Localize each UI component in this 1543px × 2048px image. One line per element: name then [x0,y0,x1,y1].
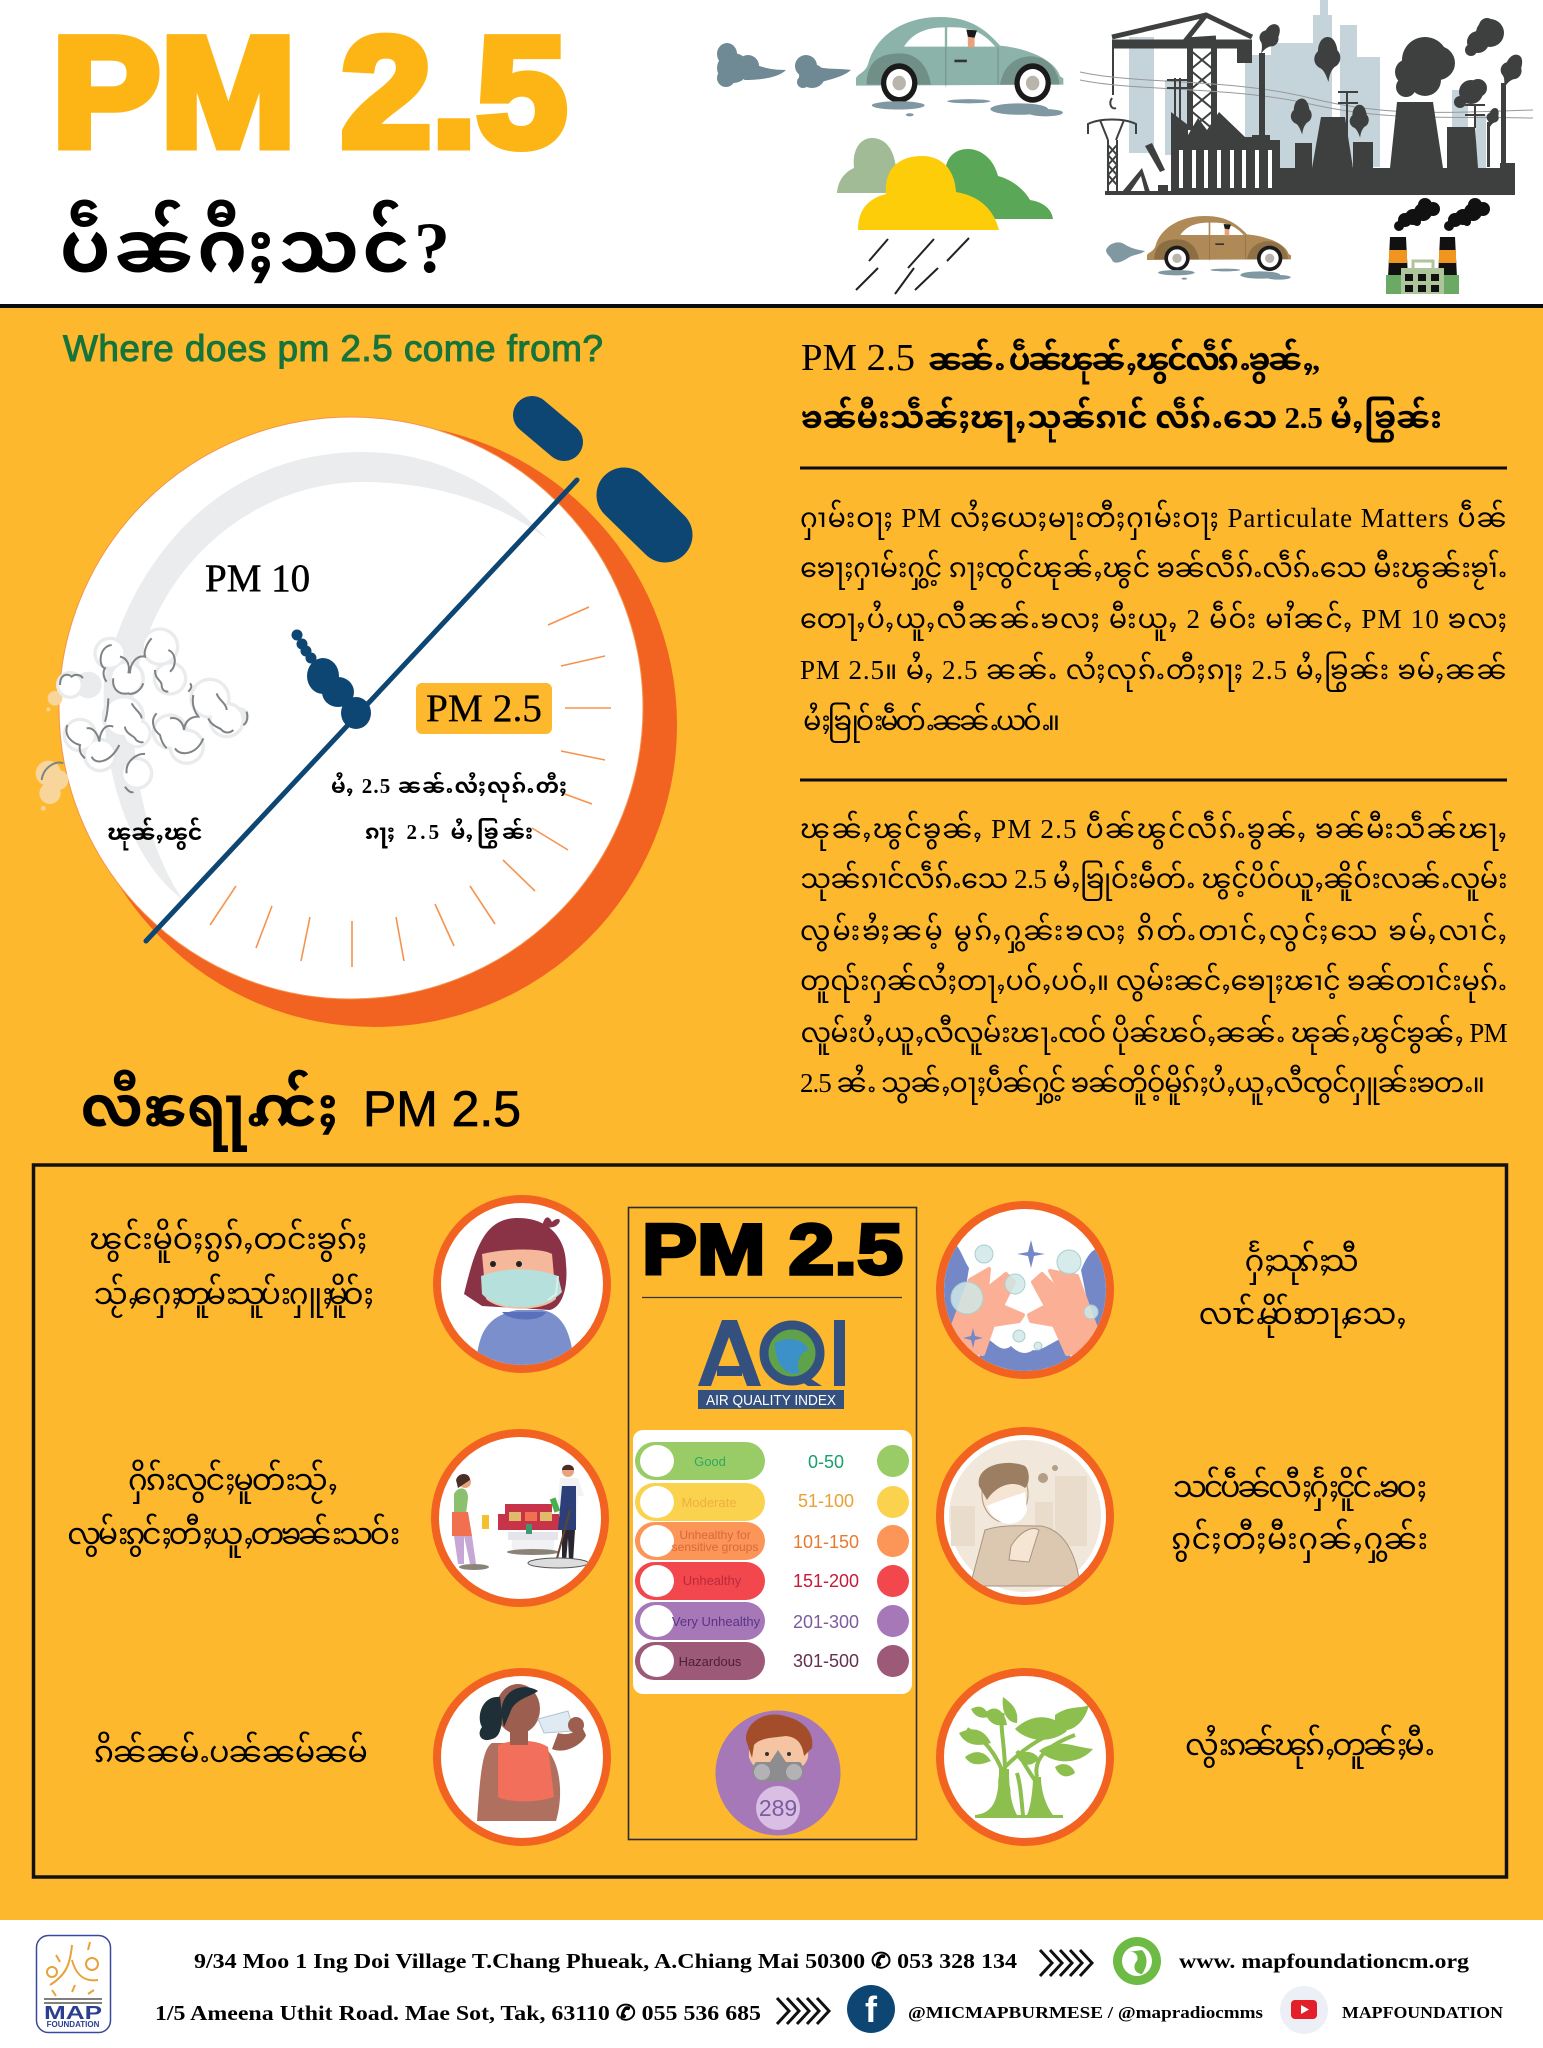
heading: prevention PM 2.5: PM 2.5 [363,1081,521,1137]
text block: PM definition: မႆႈၶြုဝ်းမဵတ်ႉၼၼ်ႉယဝ်ႉ။ [803,702,1060,743]
tip text: see a doctor: သင်ပဵၼ်လီႈႁႅႈငိူင်ႉၶဝႈ [1173,1465,1427,1512]
icon: couple cleaning [435,1433,605,1603]
tip text: wear mask outside [89,1217,374,1319]
clock diagram [36,415,677,1027]
label: PM 2.5 description: ၵႃႈ 2.5 မႆႇၶြွၼ်း [365,816,533,849]
icon: boy with respirator and 289 reading [716,1710,840,1836]
skyline buildings [1129,0,1486,173]
AQI logo: AIR QUALITY INDEX [706,1393,836,1409]
label: PM 2.5 badge: PM 2.5 [426,687,542,730]
tip text: wash hands [1199,1239,1407,1339]
AQI table [633,1430,912,1694]
text block: health effects: လူမ်းပႆႇယူႇလီလူမ်းၽႃႉၸဝ် ပိုၼ်ၽဝ်ႇၼၼ်ႉ ၽုၼ်ႇၽွင်ၶွၼ်ႇ PM [801,1014,1508,1055]
illustration: teal car with exhaust [717,17,1063,116]
icon: woman drinking water [437,1672,607,1842]
row: good: 0-50 [808,1452,844,1472]
panel: AQI centre card [628,1208,916,1840]
row: moderate: Moderate [682,1495,736,1510]
crane and power lines [1080,15,1533,192]
icon: man coughing in mask [940,1431,1110,1601]
heading: PM 2.5 explanation: ၶၼ်မီးသဵၼ်ႈၽႃႇသုၼ်ၵၢင် လဵၵ်ႉသေ 2.5 မႆႇၶြွၼ်း [801,397,1442,442]
tip text: clean the house [67,1458,400,1559]
label: PM 2.5 description: မႆႇ 2.5 ၼၼ်ႉလႆႈလုၵ်ႉတီႈ [331,770,567,803]
AQI logo [698,1320,845,1409]
factory silhouette [1171,102,1515,195]
tick marks [210,607,611,967]
icon: trees [940,1672,1110,1842]
illustration: small factory [1386,198,1490,294]
tip text: wash hands: လၢင်ႉမိုဝ်းတႃႇသေႇ [1199,1292,1407,1339]
label: PM 2.5 description [331,770,567,849]
label: PM 10: PM 10 [205,557,310,600]
row: good [635,1442,909,1480]
dust cloud [36,627,249,811]
icon: washing hands [940,1205,1110,1375]
row: unhealthy for sensitive groups: sensitive groups [672,1540,758,1554]
card title: PM 2.5 [642,1211,903,1290]
label: dust and smoke: ၽုၼ်ႇၽွင် [107,817,202,850]
divider [800,466,1507,470]
tip text: wear mask outside: သႂ်ႇႁေႈတူမ်းသူပ်း ႁူႈမိူဝ်ႈ [94,1272,374,1319]
row: hazardous [635,1642,909,1680]
illustration: clouds and rain [837,138,1053,294]
row: hazardous: 301-500 [793,1651,859,1671]
text block: PM definition: ႁၢမ်းဝႃႈ PM လႆႈယေႈမႃးတီႈႁၢမ်းဝႃႈ Particulate Matters ပဵၼ် [800,499,1507,540]
title: Shan question: ပဵၼ်ဂီႈသင်? [60,199,450,288]
footer background [0,1920,1543,2048]
text block: PM definition: တေႃႇပႆႇယူႇလီၼၼ်ႉၶလႈ မီးယူႇ 2 မဵဝ်း မၢႆၼင်ႇ PM 10 ၶလႈ [800,600,1507,641]
row: unhealthy for sensitive groups [635,1522,909,1560]
footer logo: MAP Foundation: FOUNDATION [47,2020,100,2029]
header rule [0,304,1543,308]
heading: PM 2.5 explanation [801,337,1442,442]
icon: facebook: f [865,1989,878,2030]
footer logo: MAP Foundation [36,1936,110,2032]
row: very unhealthy [635,1602,909,1640]
stopwatch buttons [532,415,564,442]
text block: health effects: တူၺ်းႁၼ်လႆႈတႃႇပဝ်ႇပဝ်ႇ။ လွမ်းၼင်ႇၶေႃႈၽၢင့် ၶၼ်တၢင်းမုၵ်ႉ [800,962,1507,1003]
row: unhealthy: Unhealthy [683,1573,742,1588]
footer logo: MAP Foundation: MAP [44,2003,102,2023]
grey sweep [104,452,547,900]
clock face [59,417,643,999]
orange background [0,308,1543,1920]
row: very unhealthy: 201-300 [793,1612,859,1632]
row: unhealthy for sensitive groups: 101-150 [793,1532,859,1552]
tip text: wash hands: ႁႅႈသုၵ်ႈသီ [1245,1239,1359,1286]
text block: health effects [800,810,1508,1105]
text block: health effects: ၽုၼ်ႇၽွင်ၶွၼ်ႇ PM 2.5 ပဵၼ်ၽွင်လဵၵ်ႉၶွၼ်ႇ ၶၼ်မီးသဵၼ်ၽႃႇ [800,810,1507,851]
text block: PM definition: ၶေႃႈႁၢမ်းႁွင့် ၵႃႈၸွင်ၽုၼ်ႇၽွင် ၶၼ်လဵၵ်ႉလဵၵ်ႉသေ မီးၽွၼ်းၶႂၢ်ႉ [800,549,1507,590]
text block: PM definition [800,499,1507,743]
subheading: where does pm 2.5 come from: Where does pm 2.5 come from? [63,328,603,369]
footer: Chiang Mai address: 9/34 Moo 1 Ing Doi Village T.Chang Phueak, A.Chiang Mai 50300 ✆ 053 328 134 [194,1949,1017,1973]
text block: health effects: လွမ်းၶႆႈၼမ့် မွၵ်ႇႁွၼ်းၶလႈ ၵိတ်ႉတၢင်ႇလွင်ႈသေ ၶမ်ႇလၢင်ႇ [800,912,1507,953]
card frame [628,1208,916,1840]
illustration: brown car with exhaust [1106,216,1291,280]
row: hazardous: Hazardous [679,1654,742,1669]
text block: PM definition: PM 2.5။ မႆႇ 2.5 ၼၼ်ႉ လႆႈလုၵ်ႉတီႈၵႃႈ 2.5 မႆႇၶြွၼ်း ၶမ်ႇၼၼ် [800,651,1507,692]
footer: youtube channel: MAPFOUNDATION [1342,2003,1504,2022]
footer: Mae Sot address: 1/5 Ameena Uthit Road. Mae Sot, Tak, 63110 ✆ 055 536 685 [155,2001,761,2025]
arrow: chevrons to social [777,1998,829,2024]
row: unhealthy for sensitive groups: Unhealthy for [679,1528,751,1542]
tip text: see a doctor: ၵွင်ႈတီႈမီးႁၼ်ႇႁွၼ်း [1171,1517,1428,1564]
footer: website: www. mapfoundationcm.org [1179,1949,1469,1973]
row: very unhealthy: Very Unhealthy [672,1614,761,1629]
row: good: Good [694,1454,726,1469]
panel: prevention frame [34,1165,1506,1877]
divider [800,778,1507,782]
tip text: see a doctor [1171,1465,1428,1564]
diagonal clock hand [146,480,577,941]
icon: youtube [1280,1986,1328,2034]
tip text: wear mask outside: ၽွင်းမိူဝ်ႈၵွၵ်ႇတင်းၶွၵ်ႈ [89,1217,367,1264]
short hand beads [292,630,371,729]
tip text: drink water: ၵိၼ်ၼမ်ႉပၼ်ၼမ်ၼမ် [94,1730,368,1769]
icon: facebook [847,1985,895,2033]
icon: globe [1113,1937,1161,1985]
row: moderate [635,1483,909,1521]
icon: girl wearing mask [437,1199,607,1369]
clock rim [73,423,677,1027]
heading: PM 2.5 explanation: PM 2.5 [801,337,915,379]
tip text: clean the house: ႁိၵ်းလွင်ႈမူတ်းသႂ်ႇ [128,1458,338,1505]
text block: health effects: သုၼ်ၵၢင်လဵၵ်ႉသေ 2.5 မႆႇၶြုဝ်းမဵတ်ႉ ၽွင့်ပိဝ်ယူႇၼိူဝ်းလၼ်ႉလူမ်း [800,860,1507,901]
tip text: clean the house: လွမ်းၵွင်ႈတီႈယူႇတၶၼ်းသဝ်း [67,1512,400,1559]
title: PM 2.5: PM 2.5 [52,6,567,180]
chimneys, oil pump and smoke [1105,18,1528,195]
row: moderate: 51-100 [798,1491,854,1511]
tip text: plant trees: လွႆးၵၼ်ၽုၵ်ႇတူၼ်ႈမီႉ [1185,1723,1435,1770]
row: unhealthy: 151-200 [793,1571,859,1591]
text block: health effects: 2.5 ၼႆႉ သွၼ်ႇဝႃႈပဵၼ်ႁွင့် ၶၼ်တိူဝ့်မိူၵ်ႈပႆႇယူႇလီၸွင်ႁူၼ်းၶတႉ။ [800,1064,1485,1105]
illustration: industrial skyline [1080,0,1533,195]
row: unhealthy [635,1562,909,1600]
footer: social handles: @MICMAPBURMESE / @mapradiocmms [908,2003,1263,2022]
heading: PM 2.5 explanation: ၼၼ်ႉ ပဵၼ်ၽုၼ်ႇၽွင်လဵၵ်ႉၶွၼ်ႇ, [928,339,1320,384]
arrow: chevrons to website [1040,1950,1092,1976]
heading: prevention PM 2.5: လီးရေႃႉဂင်ႈ [81,1069,339,1152]
icon: boy with respirator and 289 reading: 289 [759,1795,797,1821]
heading: prevention PM 2.5 [81,1069,521,1152]
